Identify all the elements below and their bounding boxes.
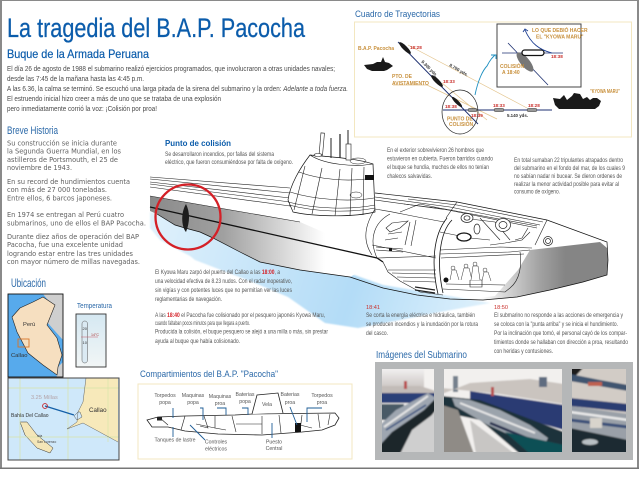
conning tower xyxy=(288,155,375,216)
introduction text: El día 26 de agosto de 1988 el submarino realizó ejercicios programados, que involucraron a otras unidades navales; xyxy=(7,64,335,73)
text: 18:00 and 18:40: El Kyowa Maru zarpó del puerto del Callao a las 18:00, a xyxy=(155,269,280,276)
photo 2 xyxy=(442,367,564,454)
text: 18:41: 18:41 xyxy=(366,305,380,311)
illustration: submarine cutaway xyxy=(150,130,608,300)
map: Bahía del Callao: San Lorenzo xyxy=(37,440,56,444)
text: 18:00 and 18:40: ayuda al buque que había colisionado. xyxy=(155,338,240,345)
trajectory labels: 18:28 xyxy=(410,45,422,50)
map: Bahía del Callao: Callao xyxy=(89,407,107,414)
inset: what should have been done: EL "KYOWA MARU" xyxy=(536,34,584,40)
tan bearing lines xyxy=(393,45,527,120)
pointers xyxy=(173,407,322,440)
hull right gray xyxy=(470,242,608,300)
compartment labels: Baterias xyxy=(235,392,255,398)
text block: history: submarinos, uno de ellos el BAP Pacocha. xyxy=(7,220,146,228)
map: Bahía del Callao: Isla xyxy=(37,434,42,438)
trajectory labels: 9.300 yds. xyxy=(420,59,439,78)
compartment labels xyxy=(154,392,333,452)
water under submarine xyxy=(150,212,490,328)
text: survivors: el buque se hundía, muchos de ellos no tenían xyxy=(387,164,489,171)
text: 18:00 and 18:40: una velocidad efectiva de 8.23 nudos. Con el radar inoperativo, xyxy=(155,278,292,285)
map: Peru: Callao xyxy=(11,353,27,359)
periscope wells and hatches xyxy=(457,214,552,246)
text block: history: noviembre de 1943. xyxy=(7,164,72,172)
text: 18:50 xyxy=(494,305,628,355)
text: 18:50: con heridas y contusiones. xyxy=(494,348,553,355)
map: Peru xyxy=(8,294,63,377)
hull left gray xyxy=(150,196,383,277)
compartment labels: popa xyxy=(239,399,251,405)
deck lines right xyxy=(375,197,547,245)
inset: what should have been done: A 18:40 xyxy=(502,70,520,76)
text block: history: Su construcción se inicia durante xyxy=(7,140,117,148)
trajectory labels: 18:38 xyxy=(445,104,457,109)
text block: history: Durante diez años de operación del BAP xyxy=(7,233,139,241)
text: survivors xyxy=(387,147,493,180)
icon: thermometer: 20 xyxy=(82,326,88,331)
compartment labels: Central xyxy=(266,446,282,452)
introduction text: A las 6.36, la calma se terminó. Se escuchó una larga pitada de la sirena del submarino y la orden: Adelante a toda fuerza. xyxy=(7,84,348,93)
text block: history: astilleros de Portsmouth, el 25 de xyxy=(7,156,118,164)
text: 18:41: se producen incendios y la inundación por la rotura xyxy=(366,321,478,328)
text: 18:00 and 18:40 xyxy=(155,269,328,345)
introduction text: desde las 7:45 de la mañana hasta las 4:45 p.m. xyxy=(7,74,144,83)
text block: history: con más de 27 000 toneladas. xyxy=(7,186,107,194)
icon: Kyowa Maru silhouette xyxy=(553,93,601,109)
arrow to inset xyxy=(475,55,496,95)
trajectory labels: 5.140 yds. xyxy=(507,113,528,118)
submarine section xyxy=(147,393,339,435)
compartment labels: Maquinas xyxy=(209,394,232,400)
compartment labels: proa xyxy=(215,401,225,407)
trajectory labels: "KYOWA MARU" xyxy=(590,89,620,95)
map: Bahía del Callao: 3.25 Millas xyxy=(31,395,58,401)
trajectory labels: 18:28 xyxy=(528,103,540,108)
text: survivors: En el exterior sobrevivieron 26 hombres que xyxy=(387,147,484,154)
photo 3 xyxy=(572,369,626,452)
compartment labels: Torpedos xyxy=(311,393,333,399)
compartment labels: Tanques de lastre xyxy=(155,438,196,444)
text: 18:41 xyxy=(366,305,478,337)
heading: Imágenes del Submarino: Imágenes del Submarino xyxy=(376,349,467,361)
trajectory labels: AVISTAMIENTO xyxy=(392,81,429,87)
submarine course line xyxy=(398,42,478,124)
icon: thermometer: 10 xyxy=(82,340,88,345)
lower deck section xyxy=(372,245,443,295)
text: fires xyxy=(165,151,293,166)
text: fires: Se desarrollaron incendios, por fallas del sistema xyxy=(165,151,274,158)
text block: history: la Segunda Guerra Mundial, en los xyxy=(7,148,121,156)
heading: Breve Historia: Breve Historia xyxy=(7,125,59,137)
ship positions xyxy=(468,108,537,112)
subtitle: Buque de la Armada Peruana xyxy=(7,47,149,61)
trajectory labels: 18:33 xyxy=(443,79,455,84)
text block: history: con mayor número de millas navegadas. xyxy=(7,258,140,266)
compartment labels: popa xyxy=(187,400,199,406)
trajectory labels: 18:33 xyxy=(493,103,505,108)
forward compartment xyxy=(366,209,416,258)
trajectory labels: 18:39 xyxy=(471,113,483,118)
hull outline xyxy=(150,193,608,300)
collision circle xyxy=(442,90,478,134)
deck lines left xyxy=(150,177,312,222)
introduction text xyxy=(7,64,348,113)
red collision circle xyxy=(156,184,220,250)
text: survivors: chalecos salvavidas. xyxy=(387,173,432,180)
trajectory labels: PUNTO DE xyxy=(447,116,473,122)
submarine positions xyxy=(398,41,463,108)
text: trapped crew xyxy=(514,157,625,196)
map: Peru: Perú xyxy=(23,322,35,328)
trajectory labels: 8.700 yds. xyxy=(448,63,469,77)
bulkhead xyxy=(434,218,452,294)
heading: Punto de colisión: Punto de colisión xyxy=(165,138,231,148)
map: Bahía del Callao xyxy=(8,378,119,460)
inset: what should have been done xyxy=(497,24,588,87)
text: 18:00 and 18:40: sin vigías y con potentes luces que no permitían ver las luces xyxy=(155,287,292,294)
compartment labels: proa xyxy=(317,400,327,406)
heading: Cuadro de Trayectorias: Cuadro de Trayectorias xyxy=(355,9,440,20)
compartment labels: proa xyxy=(285,400,295,406)
icon: thermometer xyxy=(76,314,106,367)
panel: trajectory chart xyxy=(354,22,632,137)
title: La tragedia del B.A.P. Pacocha xyxy=(7,13,305,43)
compartment labels: Puesto xyxy=(266,440,282,446)
photo 1 xyxy=(382,369,434,452)
masts xyxy=(314,130,351,160)
inset: what should have been done: 18:38 xyxy=(551,54,563,59)
text: 18:00 and 18:40: Producida la colisión, el buque pesquero se alejó a una milla o más, sin prestar xyxy=(155,328,328,336)
collision hole xyxy=(182,204,189,232)
text: 18:41: del casco. xyxy=(366,330,388,337)
text: 18:50: 18:50 xyxy=(494,305,508,311)
trajectory labels: PTO. DE xyxy=(392,74,413,80)
compartment labels: popa xyxy=(159,400,171,406)
text: trapped crew: consumo de oxígeno. xyxy=(514,188,560,196)
ship course line xyxy=(443,109,552,111)
text block: history: Entre ellos, 6 barcos japoneses. xyxy=(7,194,112,202)
inset: what should have been done: COLISIÓN xyxy=(500,62,525,70)
trajectory labels: B.A.P. Pacocha xyxy=(358,46,394,52)
text: 18:00 and 18:40: A las 18:40 el Pacocha fue colisionado por el pesquero japonés Kyowa Maru, xyxy=(155,312,325,319)
heading: Compartimientos: Compartimientos del B.A.P. "Pacocha" xyxy=(140,369,278,380)
text block: history: En su record de hundimientos cuenta xyxy=(7,178,130,186)
compartment labels: Vela xyxy=(262,402,272,408)
heading: Temperatura: Temperatura xyxy=(77,303,112,310)
heading: Ubicación: Ubicación xyxy=(11,276,46,290)
icon: BAP ship silhouette xyxy=(364,57,393,71)
panel: compartments diagram xyxy=(138,384,352,459)
trajectory labels xyxy=(358,45,620,128)
compartment labels: Maquinas xyxy=(182,393,205,399)
crew figures xyxy=(450,262,491,281)
text: fires: eléctrico, que fueron consumiéndose por falta de oxígeno. xyxy=(165,159,293,166)
text: 18:00 and 18:40: cuando faltaban pocos minutos para que llegara a puerto. xyxy=(155,320,250,327)
main compartment xyxy=(440,218,532,292)
text: survivors: estuvieron en cubierta. Fueron barridos cuando xyxy=(387,156,493,162)
map: Bahía del Callao: Bahía Del Callao xyxy=(11,413,49,419)
text block: history: Pacocha, fue una excelente unidad xyxy=(7,241,123,249)
trajectory labels: COLISIÓN xyxy=(449,120,474,128)
compartment labels: Baterias xyxy=(280,392,300,398)
panel: submarine photos xyxy=(375,362,633,460)
compartment labels: eléctricos xyxy=(205,446,227,452)
inset: what should have been done: LO QUE DEBIÓ HACER xyxy=(532,26,588,34)
text: 18:41: Se corta la energía eléctrica e hidráulica, también xyxy=(366,312,475,319)
text block: history: logrando estar entre las tres unidades xyxy=(7,250,133,258)
text block: history xyxy=(7,140,146,266)
compartment labels: Controles xyxy=(205,440,228,446)
introduction text: pero inmediatamente corrió la voz: ¡Colisión por proa! xyxy=(7,104,157,113)
compartment labels: Torpedos xyxy=(154,393,176,399)
icon: thermometer: 14°C xyxy=(91,333,99,337)
text: 18:00 and 18:40: reglamentarias de navegación. xyxy=(155,296,222,303)
introduction text: El estruendo inicial hizo creer a más de uno que se trataba de una explosión xyxy=(7,94,221,103)
text block: history: En 1974 se entregan al Perú cuatro xyxy=(7,211,124,219)
